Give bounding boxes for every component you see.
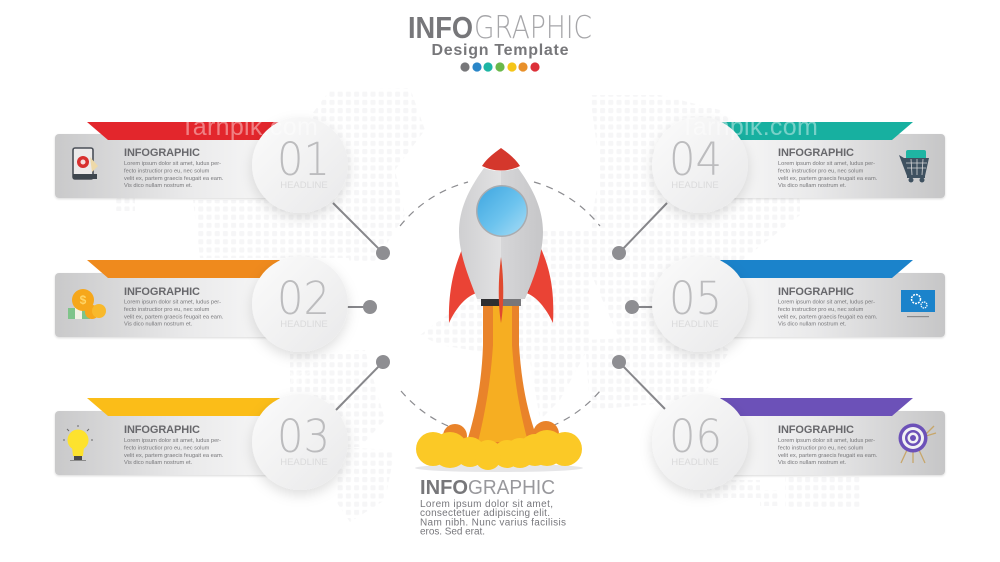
circle 03: 03 bbox=[277, 410, 330, 463]
panel 3: INFOGRAPHIC bbox=[124, 424, 200, 436]
panel 2: Vis dico nullam nostrum et. bbox=[124, 322, 193, 328]
bottom text block: eros. Sed erat. bbox=[420, 526, 485, 538]
panel 3: Vis dico nullam nostrum et. bbox=[124, 460, 193, 466]
icon: shopping cart bbox=[899, 150, 929, 182]
icon: target bbox=[898, 424, 936, 463]
dotted world map background bbox=[115, 88, 860, 522]
circle 03: HEADLINE bbox=[280, 457, 328, 468]
icon: coins bbox=[68, 289, 106, 319]
bottom text block: GRAPHIC bbox=[468, 477, 555, 499]
panel 5: Lorem ipsum dolor sit amet, ludus per- bbox=[778, 300, 875, 306]
panel 6: Vis dico nullam nostrum et. bbox=[778, 460, 847, 466]
dashed orbit arcs bbox=[400, 182, 600, 426]
text: Vis dico nullam nostrum et. bbox=[124, 183, 193, 189]
icon: phone with target bbox=[73, 148, 98, 179]
rocket exhaust cloud bbox=[415, 306, 583, 472]
circle 01 bbox=[252, 117, 348, 213]
panel 6: INFOGRAPHIC bbox=[778, 424, 854, 436]
panel 4: fecto instructior pro eu, nec solum bbox=[778, 168, 864, 174]
colour dots under title bbox=[460, 62, 540, 72]
rocket fins bbox=[449, 240, 553, 323]
circle 02 bbox=[252, 256, 348, 352]
text: Lorem ipsum dolor sit amet, ludus per- bbox=[124, 161, 221, 167]
watermarks bbox=[178, 113, 818, 391]
text bbox=[124, 147, 224, 189]
panel 2: INFOGRAPHIC bbox=[124, 286, 200, 298]
icon: coins: $ bbox=[80, 293, 87, 307]
rocket bbox=[449, 148, 553, 323]
panel 5: fecto instructior pro eu, nec solum bbox=[778, 307, 864, 313]
icon: monitor with gears bbox=[901, 290, 935, 317]
panel 3: velit ex, partem graecis feugait ea eam. bbox=[124, 453, 224, 459]
rocket nose bbox=[482, 148, 520, 170]
rocket window bbox=[476, 185, 528, 237]
circle 04: HEADLINE bbox=[671, 180, 719, 191]
panel 2 bbox=[55, 260, 290, 337]
panel 2: fecto instructior pro eu, nec solum bbox=[124, 307, 210, 313]
panel 4: INFOGRAPHIC bbox=[778, 147, 854, 159]
icon: light bulb bbox=[63, 425, 93, 461]
card bbox=[55, 134, 290, 198]
panel 4: Vis dico nullam nostrum et. bbox=[778, 183, 847, 189]
bottom text block: Nam nibh. Nunc varius facilisis bbox=[420, 518, 566, 528]
circle 06: 06 bbox=[669, 410, 722, 463]
circle 01: 01 bbox=[277, 133, 330, 186]
panel 5: Vis dico nullam nostrum et. bbox=[778, 322, 847, 328]
rocket body bbox=[459, 168, 543, 299]
panel 4: Lorem ipsum dolor sit amet, ludus per- bbox=[778, 161, 875, 167]
circle 02: 02 bbox=[277, 272, 330, 325]
title: INFO bbox=[408, 10, 473, 45]
panel 5: velit ex, partem graecis feugait ea eam. bbox=[778, 314, 878, 320]
panel 3: Lorem ipsum dolor sit amet, ludus per- bbox=[124, 438, 221, 444]
panel 2: velit ex, partem graecis feugait ea eam. bbox=[124, 314, 224, 320]
bottom text block: Lorem ipsum dolor sit amet, bbox=[420, 499, 553, 510]
circle 01: HEADLINE bbox=[280, 180, 328, 191]
circle 03 bbox=[252, 394, 348, 490]
panel 3 bbox=[55, 398, 290, 475]
bottom text block: consectetuer adipiscing elit. bbox=[420, 508, 550, 519]
rocket centre fin bbox=[499, 257, 503, 323]
watermarks: Tarnpik.com bbox=[680, 363, 818, 391]
circle 05: 05 bbox=[669, 272, 722, 325]
text: INFOGRAPHIC bbox=[124, 147, 200, 159]
panel 5 bbox=[710, 260, 945, 337]
circle 04 bbox=[652, 117, 748, 213]
watermarks: Tarnpik.com bbox=[680, 113, 818, 141]
connectors bbox=[333, 203, 667, 410]
panel 6: Lorem ipsum dolor sit amet, ludus per- bbox=[778, 438, 875, 444]
panel 6: fecto instructior pro eu, nec solum bbox=[778, 446, 864, 452]
circle 05 bbox=[652, 256, 748, 352]
title: Design Template bbox=[432, 42, 569, 59]
panel 1 bbox=[55, 122, 290, 198]
circle 02: HEADLINE bbox=[280, 319, 328, 330]
text: fecto instructior pro eu, nec solum bbox=[124, 168, 210, 174]
bottom text block bbox=[420, 477, 566, 538]
title: GRAPHIC bbox=[474, 10, 592, 46]
bottom text block: INFO bbox=[420, 477, 468, 499]
panel 4 bbox=[710, 122, 945, 198]
panel 6: velit ex, partem graecis feugait ea eam. bbox=[778, 453, 878, 459]
circle 04: 04 bbox=[669, 133, 722, 186]
panel 4: velit ex, partem graecis feugait ea eam. bbox=[778, 176, 878, 182]
text: velit ex, partem graecis feugait ea eam. bbox=[124, 176, 224, 182]
circle 06 bbox=[652, 394, 748, 490]
panel 5: INFOGRAPHIC bbox=[778, 286, 854, 298]
circle 05: HEADLINE bbox=[671, 319, 719, 330]
watermarks: Tarnpik.com bbox=[180, 113, 318, 141]
ribbon bbox=[87, 122, 280, 140]
title bbox=[408, 10, 592, 59]
panel 6 bbox=[710, 398, 945, 475]
panel 3: fecto instructior pro eu, nec solum bbox=[124, 446, 210, 452]
rocket nozzle bbox=[481, 299, 521, 306]
panel 2: Lorem ipsum dolor sit amet, ludus per- bbox=[124, 300, 221, 306]
circle 06: HEADLINE bbox=[671, 457, 719, 468]
watermarks: Tarnpik.com bbox=[178, 363, 316, 391]
